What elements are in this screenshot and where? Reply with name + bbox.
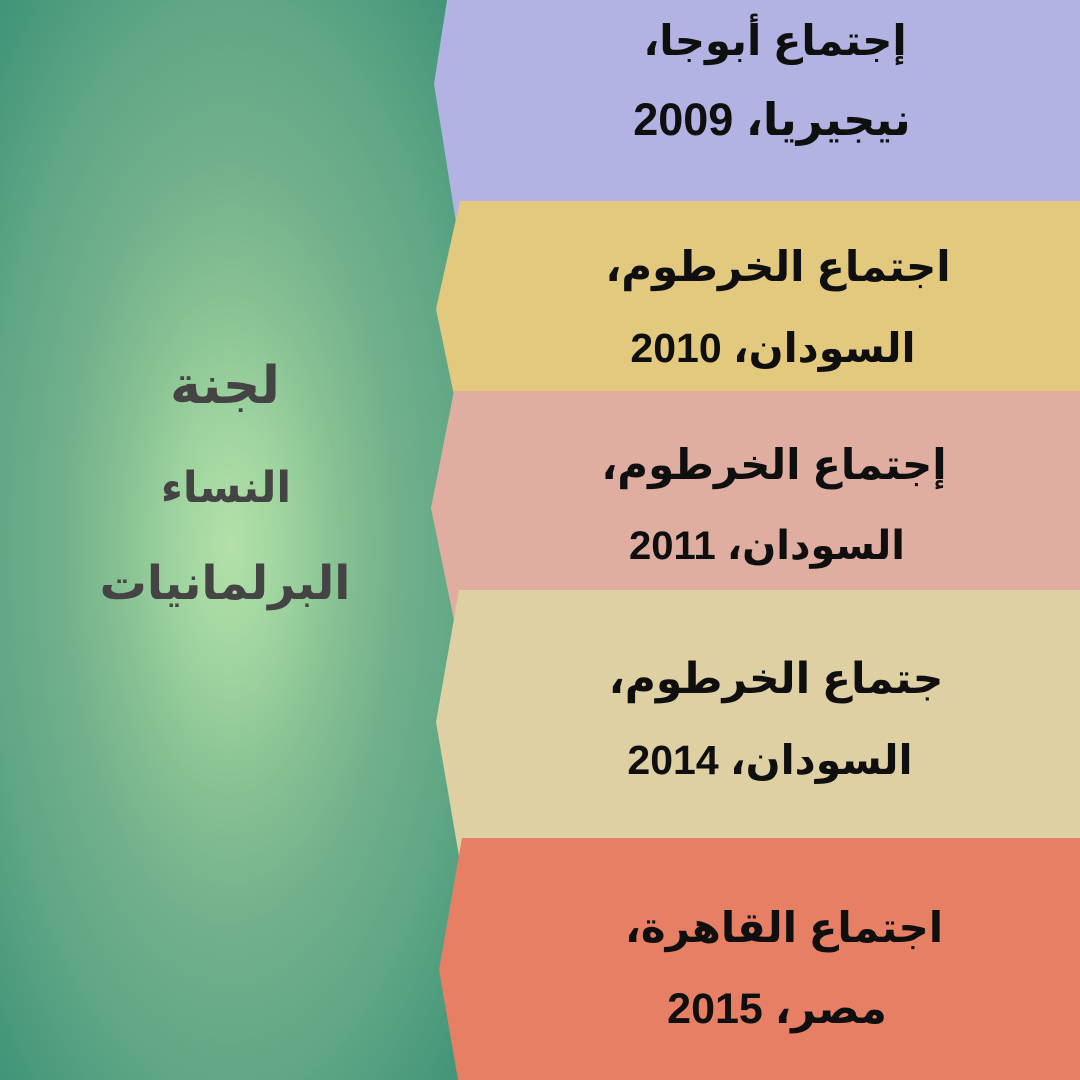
text: Khartoum 2014 line 2: السودان، 2014 bbox=[627, 737, 913, 783]
text: Khartoum 2010 line 2: السودان، 2010 bbox=[630, 325, 916, 371]
panel: Khartoum 2010 bbox=[436, 201, 1080, 400]
panel: Khartoum 2011 bbox=[431, 391, 1080, 630]
text: Cairo line 2: مصر، 2015 bbox=[667, 984, 887, 1032]
text: Abuja line 2: نيجيريا، 2009 bbox=[633, 94, 911, 145]
heading: committee title line 3: البرلمانيات bbox=[100, 556, 350, 609]
text: Khartoum 2010 line 1: اجتماع الخرطوم، bbox=[605, 242, 951, 290]
panel: Khartoum 2014 bbox=[436, 590, 1080, 862]
text: Cairo line 1: اجتماع القاهرة، bbox=[625, 904, 943, 951]
panel: Cairo 2015 bbox=[439, 838, 1080, 1080]
panel: green radial background bbox=[0, 0, 470, 1080]
heading: committee title: لجنة bbox=[170, 357, 280, 415]
text: Khartoum 2011 line 2: السودان، 2011 bbox=[629, 524, 905, 568]
panel: Abuja 2009 bbox=[434, 0, 1080, 235]
text: Khartoum 2011 line 1: إجتماع الخرطوم، bbox=[601, 440, 947, 488]
text: Khartoum 2014 line 1: جتماع الخرطوم، bbox=[609, 656, 943, 703]
text: Abuja line 1: إجتماع أبوجا، bbox=[643, 17, 907, 64]
heading: committee title line 2: النساء bbox=[161, 464, 291, 512]
